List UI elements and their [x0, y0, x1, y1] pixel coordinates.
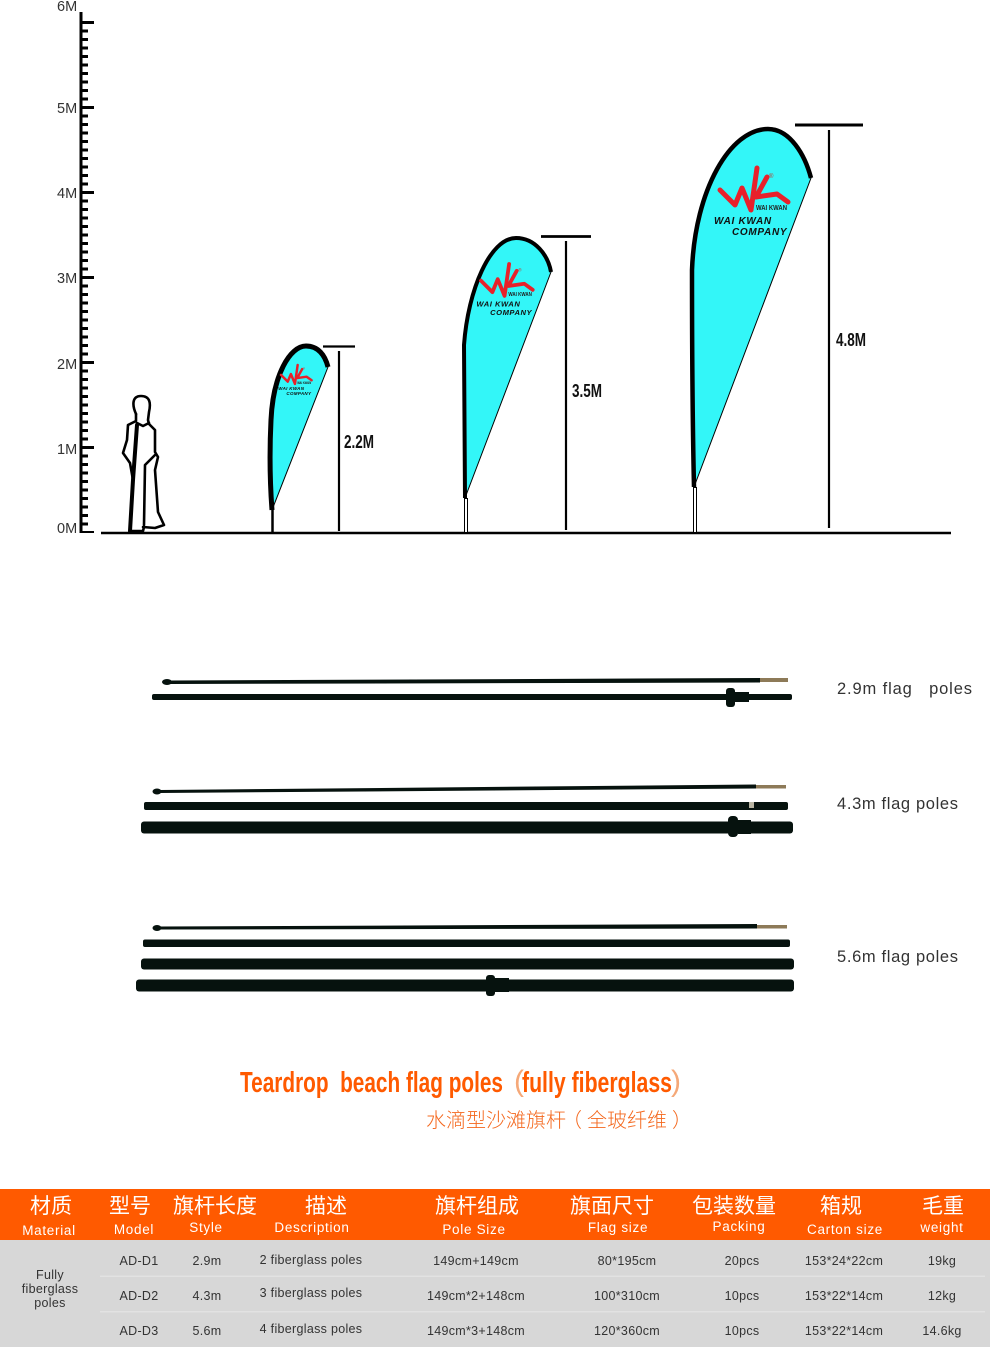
logo [476, 264, 533, 317]
flag shape [692, 129, 811, 487]
table header: Pole Size [442, 1222, 506, 1237]
dimension line [565, 241, 567, 530]
label: 4.8M [836, 330, 866, 350]
row AD-D3: 14.6kg [922, 1324, 962, 1338]
flag thick edge [464, 238, 551, 498]
row AD-D2: 153*22*14cm [805, 1289, 883, 1303]
ground line [101, 532, 951, 534]
logo: ® [769, 173, 774, 180]
material cell: poles [34, 1296, 66, 1310]
row AD-D3: 10pcs [725, 1324, 759, 1338]
table header: 旗杆组成 [435, 1195, 519, 1218]
row AD-D1: 149cm+149cm [433, 1254, 519, 1268]
flag shape [269, 345, 328, 510]
flag 4.8M [692, 125, 866, 532]
row AD-D1: 2.9m [192, 1254, 222, 1268]
flag shape [464, 238, 551, 498]
logo: COMPANY [490, 308, 532, 317]
table header: Carton size [807, 1222, 883, 1237]
row AD-D2 [100, 1276, 985, 1303]
row AD-D1: 20pcs [725, 1254, 759, 1268]
height ruler [57, 0, 87, 537]
pole [694, 488, 696, 532]
label: 4.3m: 4.3m flag poles [837, 795, 958, 813]
table header: Description [274, 1220, 350, 1235]
logo: WAI KWAN [278, 386, 305, 391]
logo: WAI KWAN [756, 205, 787, 212]
row AD-D1: 19kg [928, 1254, 956, 1268]
material cell: Fully [36, 1268, 64, 1282]
subtitle: （ [562, 1110, 582, 1132]
poles set 5.6m [136, 924, 794, 996]
table header: 型号 [109, 1195, 151, 1218]
row AD-D3: AD-D3 [119, 1324, 159, 1338]
title: fully fiberglass [522, 1067, 672, 1099]
pole section: tip [162, 678, 788, 685]
poles set 4.3m [141, 784, 793, 837]
flag 2.2M [269, 345, 374, 533]
row AD-D2: 3 fiberglass poles [260, 1286, 362, 1300]
logo: ® [303, 367, 305, 371]
pole section: tip [152, 784, 786, 794]
pole section: base [152, 688, 792, 707]
table header: 箱规 [820, 1195, 862, 1218]
dimension [795, 124, 863, 126]
logo: WAI KWAN [297, 381, 312, 385]
row AD-D1: 80*195cm [598, 1254, 656, 1268]
height ruler: 1M [57, 442, 77, 458]
table header: Flag size [588, 1220, 648, 1235]
poles set 2.9m [152, 678, 792, 707]
height ruler: 5M [57, 101, 77, 117]
row AD-D1: AD-D1 [119, 1254, 159, 1268]
table header [0, 1189, 990, 1240]
height ruler: 0M [57, 521, 77, 537]
table header: 描述 [305, 1195, 347, 1218]
row AD-D1: 153*24*22cm [805, 1254, 883, 1268]
title: ) [671, 1065, 681, 1098]
subtitle: 全玻纤维 [587, 1109, 667, 1132]
dimension [323, 346, 355, 531]
pole section: tip [152, 924, 787, 931]
row AD-D2: 10pcs [725, 1289, 759, 1303]
table header: Style [189, 1220, 223, 1235]
logo: WAI KWAN [508, 292, 532, 298]
row AD-D3: 5.6m [192, 1324, 222, 1338]
label: 5.6m: 5.6m flag poles [837, 948, 958, 966]
pole section: middle [144, 802, 788, 810]
height ruler: 3M [57, 271, 77, 287]
table header: Material [22, 1223, 76, 1238]
table [0, 1189, 990, 1347]
row AD-D3 [100, 1311, 985, 1338]
table header: Model [114, 1222, 154, 1237]
logo: WAI KWAN [714, 216, 772, 227]
row AD-D2: 149cm*2+148cm [427, 1289, 525, 1303]
material cell [22, 1268, 78, 1310]
row AD-D2: 12kg [928, 1289, 956, 1303]
title: ( [514, 1065, 524, 1098]
row AD-D2: 100*310cm [594, 1289, 660, 1303]
table header: weight [919, 1220, 964, 1235]
material cell: fiberglass [22, 1282, 78, 1296]
label: 2.9m: 2.9m flag poles [837, 680, 972, 698]
row AD-D3: 149cm*3+148cm [427, 1324, 525, 1338]
pole section: upper middle [143, 940, 790, 947]
flag 3.5M [464, 236, 602, 532]
pole [271, 508, 274, 533]
flag thick edge [692, 129, 811, 487]
row AD-D2: AD-D2 [119, 1289, 159, 1303]
logo: ® [518, 267, 522, 273]
table header: 包装数量 [692, 1195, 776, 1218]
dimension [541, 235, 591, 238]
table header: 材质 [30, 1195, 72, 1218]
logo: COMPANY [286, 391, 312, 396]
height ruler: 4M [57, 186, 77, 202]
subtitle: 水滴型沙滩旗杆 [426, 1110, 566, 1132]
pole section: base [141, 816, 793, 837]
dimension line [828, 130, 830, 528]
pole section: lower middle [141, 958, 794, 970]
logo: COMPANY [732, 227, 788, 238]
title: Teardrop beach flag poles [240, 1067, 503, 1099]
label: 3.5M [572, 381, 602, 401]
logo [714, 168, 788, 238]
subtitle: ） [672, 1110, 692, 1132]
height ruler: 2M [57, 357, 77, 373]
table header: 旗杆长度 [173, 1195, 257, 1218]
logo [278, 365, 312, 396]
pole [464, 498, 468, 532]
label: 2.2M [344, 432, 374, 452]
row AD-D2: 4.3m [192, 1289, 222, 1303]
row AD-D3: 153*22*14cm [805, 1324, 883, 1338]
table body background [0, 1240, 990, 1347]
row AD-D1 [119, 1253, 956, 1268]
flag thick edge [270, 346, 328, 510]
row AD-D3: 4 fiberglass poles [260, 1322, 362, 1336]
pole section: base [136, 975, 794, 996]
row AD-D3: 120*360cm [594, 1324, 660, 1338]
logo: WAI KWAN [476, 300, 520, 309]
table header: 旗面尺寸 [570, 1195, 654, 1218]
table header: Packing [713, 1219, 765, 1234]
table header: 毛重 [922, 1195, 964, 1218]
row AD-D1: 2 fiberglass poles [260, 1253, 362, 1267]
icon: person silhouette [123, 396, 164, 531]
